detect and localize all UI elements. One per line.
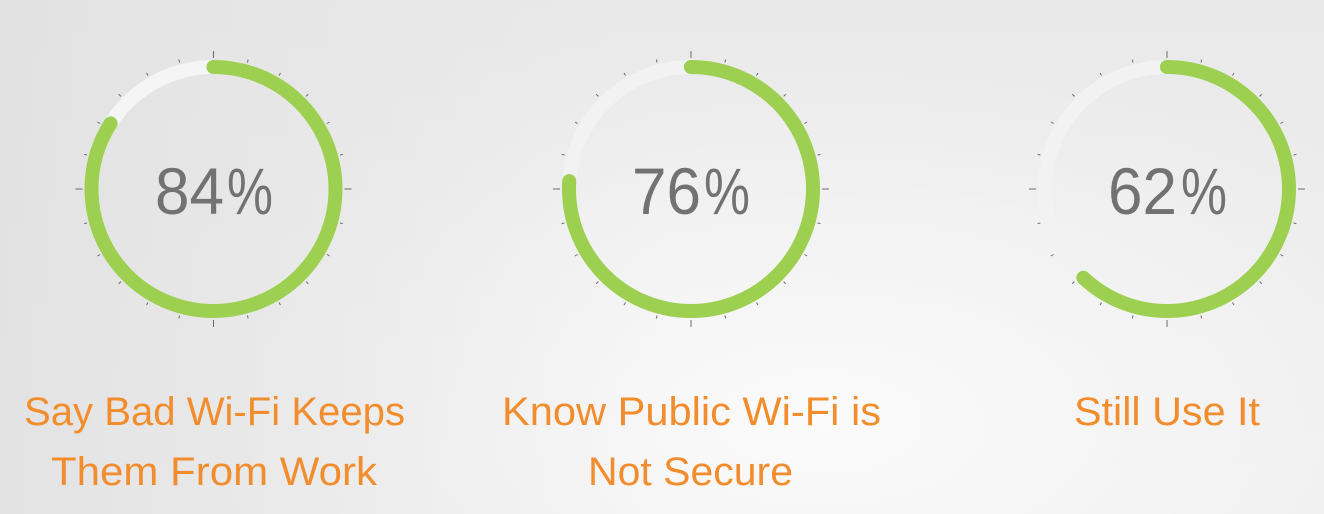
gauge ticks: 76 percent — [553, 51, 829, 327]
gauge ticks: 84 percent — [76, 51, 352, 327]
value: 62%: % — [1181, 154, 1227, 228]
panel: 84 percent gauge — [76, 51, 352, 327]
gauge track: 76 percent — [569, 67, 813, 311]
value: 76%: 76 — [632, 154, 701, 228]
gauge track: 62 percent — [1045, 67, 1289, 311]
value: 76%: % — [704, 154, 750, 228]
value: 84%: % — [227, 154, 273, 228]
gauge arc: 62 percent — [1045, 67, 1289, 311]
label: Say Bad Wi-Fi Keeps Them From Work: Them From Work — [51, 450, 378, 494]
value: 62%: 62 — [1108, 154, 1177, 228]
panel: 76 percent gauge — [553, 51, 829, 327]
panel: 62 percent gauge — [1029, 51, 1305, 327]
gauge arc: 76 percent — [569, 67, 813, 311]
label: Know Public Wi-Fi is Not Secure: Know Public Wi-Fi is — [502, 390, 881, 434]
label: Say Bad Wi-Fi Keeps Them From Work: Say Bad Wi-Fi Keeps — [24, 390, 405, 434]
label: Know Public Wi-Fi is Not Secure: Not Secure — [588, 450, 793, 494]
gauge ticks: 62 percent — [1029, 51, 1305, 327]
label: Still Use It: Still Use It — [1074, 390, 1260, 434]
label: Know Public Wi-Fi is Not Secure — [502, 390, 881, 494]
gauge track: 84 percent — [92, 67, 336, 311]
gauge arc: 84 percent — [92, 67, 336, 311]
value: 84%: 84 — [155, 154, 224, 228]
label: Say Bad Wi-Fi Keeps Them From Work — [24, 390, 405, 494]
